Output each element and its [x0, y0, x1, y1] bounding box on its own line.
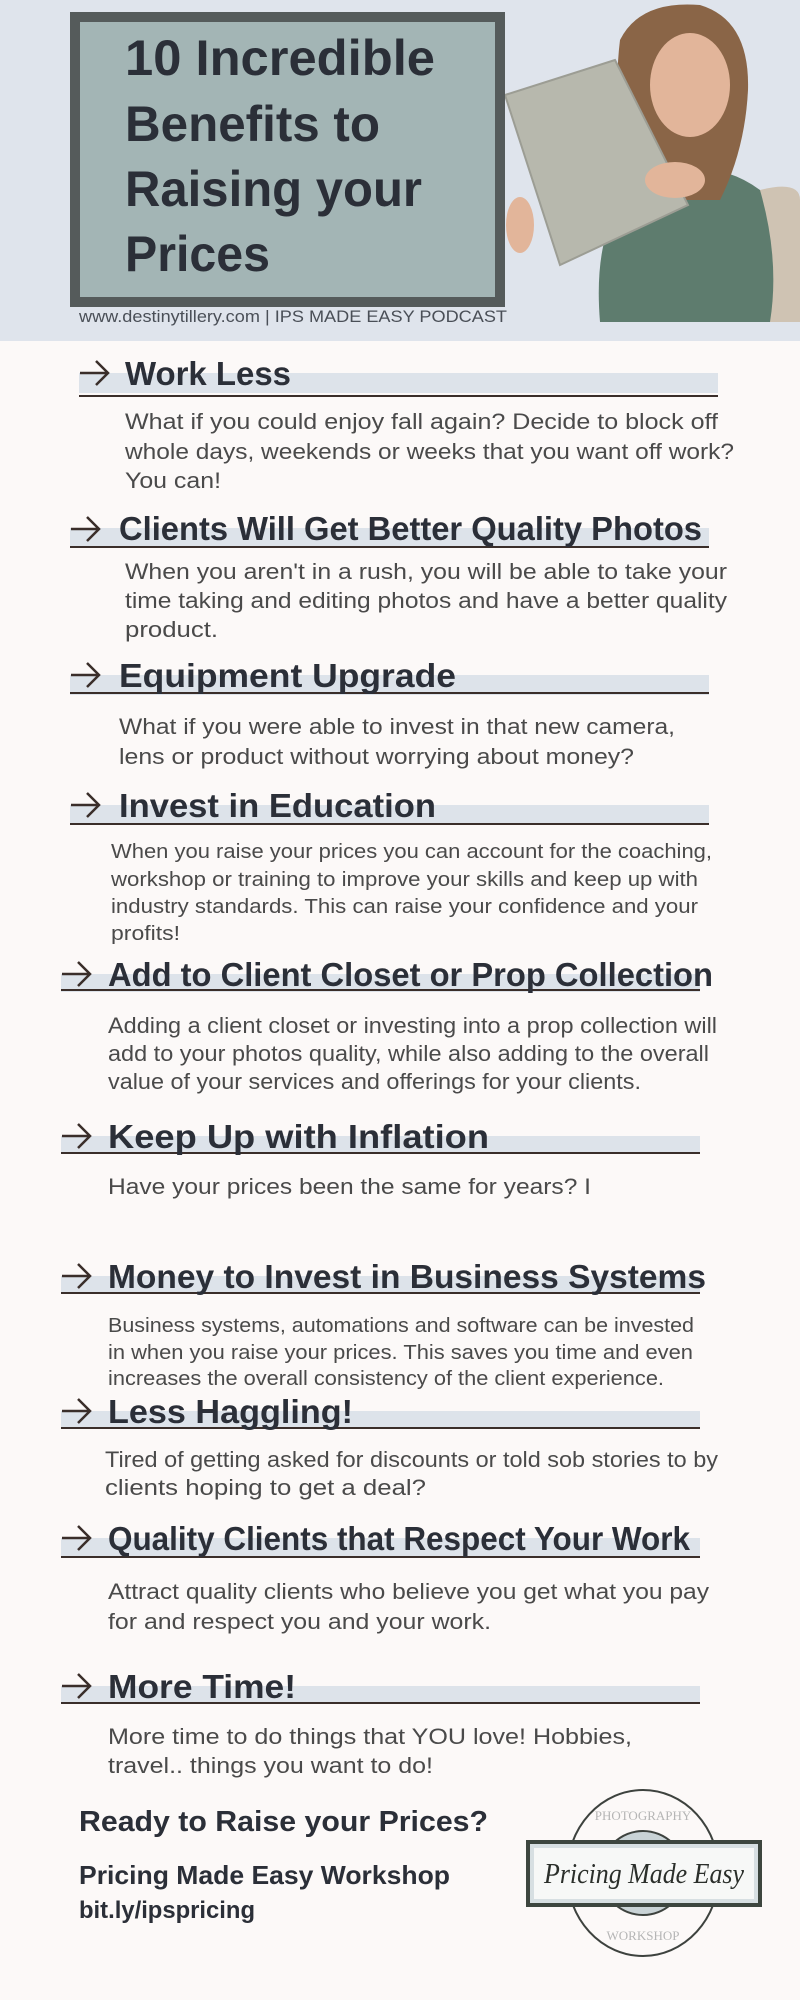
section 2: Better Quality Photos: Clients Will Get Better Quality Photos — [119, 510, 702, 547]
header background — [0, 0, 800, 341]
call to action: bit.ly/ipspricing — [79, 1897, 255, 1924]
section 1: Work Less: You can! — [125, 468, 221, 493]
section 8: Less Haggling: Tired of getting asked for discounts or told sob stories to by — [105, 1447, 718, 1472]
photo: woman with tablet — [505, 0, 800, 322]
section 4: Invest in Education: Invest in Education — [119, 787, 436, 824]
title: Prices — [125, 226, 270, 282]
section 6: Inflation: Keep Up with Inflation — [108, 1118, 489, 1155]
call to action — [79, 1806, 488, 1924]
logo: Pricing Made Easy workshop — [528, 1790, 760, 1956]
section 2: Better Quality Photos: product. — [125, 617, 218, 642]
section 3: Equipment Upgrade: What if you were able to invest in that new camera, — [119, 714, 675, 739]
call to action: Ready to Raise your Prices? — [79, 1806, 488, 1838]
section 3: Equipment Upgrade: Equipment Upgrade — [119, 657, 456, 694]
section 5: Client Closet: Add to Client Closet or Prop Collection — [108, 956, 713, 993]
arrow — [80, 361, 108, 385]
title: Benefits to — [125, 96, 380, 152]
section 4: Invest in Education: profits! — [111, 923, 180, 945]
section 5: Client Closet: Adding a client closet or investing into a prop collection will — [108, 1013, 717, 1038]
logo: Pricing Made Easy workshop: Pricing Made Easy — [543, 1859, 745, 1890]
section 7: Business Systems: increases the overall consistency of the client experience. — [108, 1368, 664, 1390]
header credit line: www.destinytillery.com | IPS MADE EASY PODCAST — [78, 307, 507, 326]
section 1: Work Less: whole days, weekends or weeks that you want off work? — [124, 439, 734, 464]
section 7: Business Systems: Business systems, automations and software can be invested — [108, 1315, 694, 1337]
section 8: Less Haggling: Less Haggling! — [108, 1393, 353, 1430]
logo: Pricing Made Easy workshop: PHOTOGRAPHY — [595, 1808, 692, 1823]
section 1: Work Less — [79, 355, 734, 493]
section 10: More Time: More Time! — [108, 1668, 296, 1705]
title: 10 Incredible — [125, 30, 435, 86]
section 8: Less Haggling: clients hoping to get a deal? — [105, 1475, 426, 1500]
title — [125, 30, 435, 282]
section 1: Work Less: What if you could enjoy fall again? Decide to block off — [125, 409, 719, 434]
section 8: Less Haggling — [61, 1393, 718, 1500]
section 7: Business Systems: in when you raise your prices. This saves you time and even — [108, 1342, 693, 1364]
section 2: Better Quality Photos: time taking and editing photos and have a better quality — [125, 588, 727, 613]
section 2: Better Quality Photos: When you aren't in a rush, you will be able to take your — [125, 559, 727, 584]
section 5: Client Closet: add to your photos quality, while also adding to the overall — [108, 1041, 709, 1066]
call to action: Pricing Made Easy Workshop — [79, 1860, 450, 1890]
section 3: Equipment Upgrade — [70, 657, 709, 769]
section 9: Quality Clients: Attract quality clients who believe you get what you pay — [108, 1579, 709, 1604]
section 6: Inflation — [61, 1118, 700, 1199]
section 9: Quality Clients — [61, 1520, 709, 1634]
section 4: Invest in Education: industry standards. This can raise your confidence and your — [111, 896, 698, 918]
section 10: More Time — [61, 1668, 700, 1778]
section 5: Client Closet: value of your services and offerings for your clients. — [108, 1069, 641, 1094]
section 5: Client Closet — [61, 956, 717, 1094]
section 2: Better Quality Photos — [70, 510, 727, 642]
section 7: Business Systems: Money to Invest in Business Systems — [108, 1258, 706, 1295]
title box — [75, 17, 500, 302]
logo: Pricing Made Easy workshop: WORKSHOP — [607, 1928, 679, 1943]
section 10: More Time: travel.. things you want to do! — [108, 1753, 433, 1778]
section 1: Work Less: Work Less — [125, 355, 291, 392]
section 10: More Time: More time to do things that YOU love! Hobbies, — [108, 1724, 632, 1749]
section 3: Equipment Upgrade: lens or product without worrying about money? — [119, 744, 634, 769]
section 7: Business Systems — [61, 1258, 706, 1390]
title: Raising your — [125, 161, 422, 217]
section 4: Invest in Education: workshop or training to improve your skills and keep up with — [110, 869, 698, 891]
section 6: Inflation: Have your prices been the same for years? I — [108, 1174, 591, 1199]
section 4: Invest in Education: When you raise your prices you can account for the coaching, — [111, 841, 712, 863]
section 9: Quality Clients: Quality Clients that Respect Your Work — [108, 1520, 691, 1557]
section 9: Quality Clients: for and respect you and your work. — [108, 1609, 491, 1634]
section 4: Invest in Education — [70, 787, 712, 945]
